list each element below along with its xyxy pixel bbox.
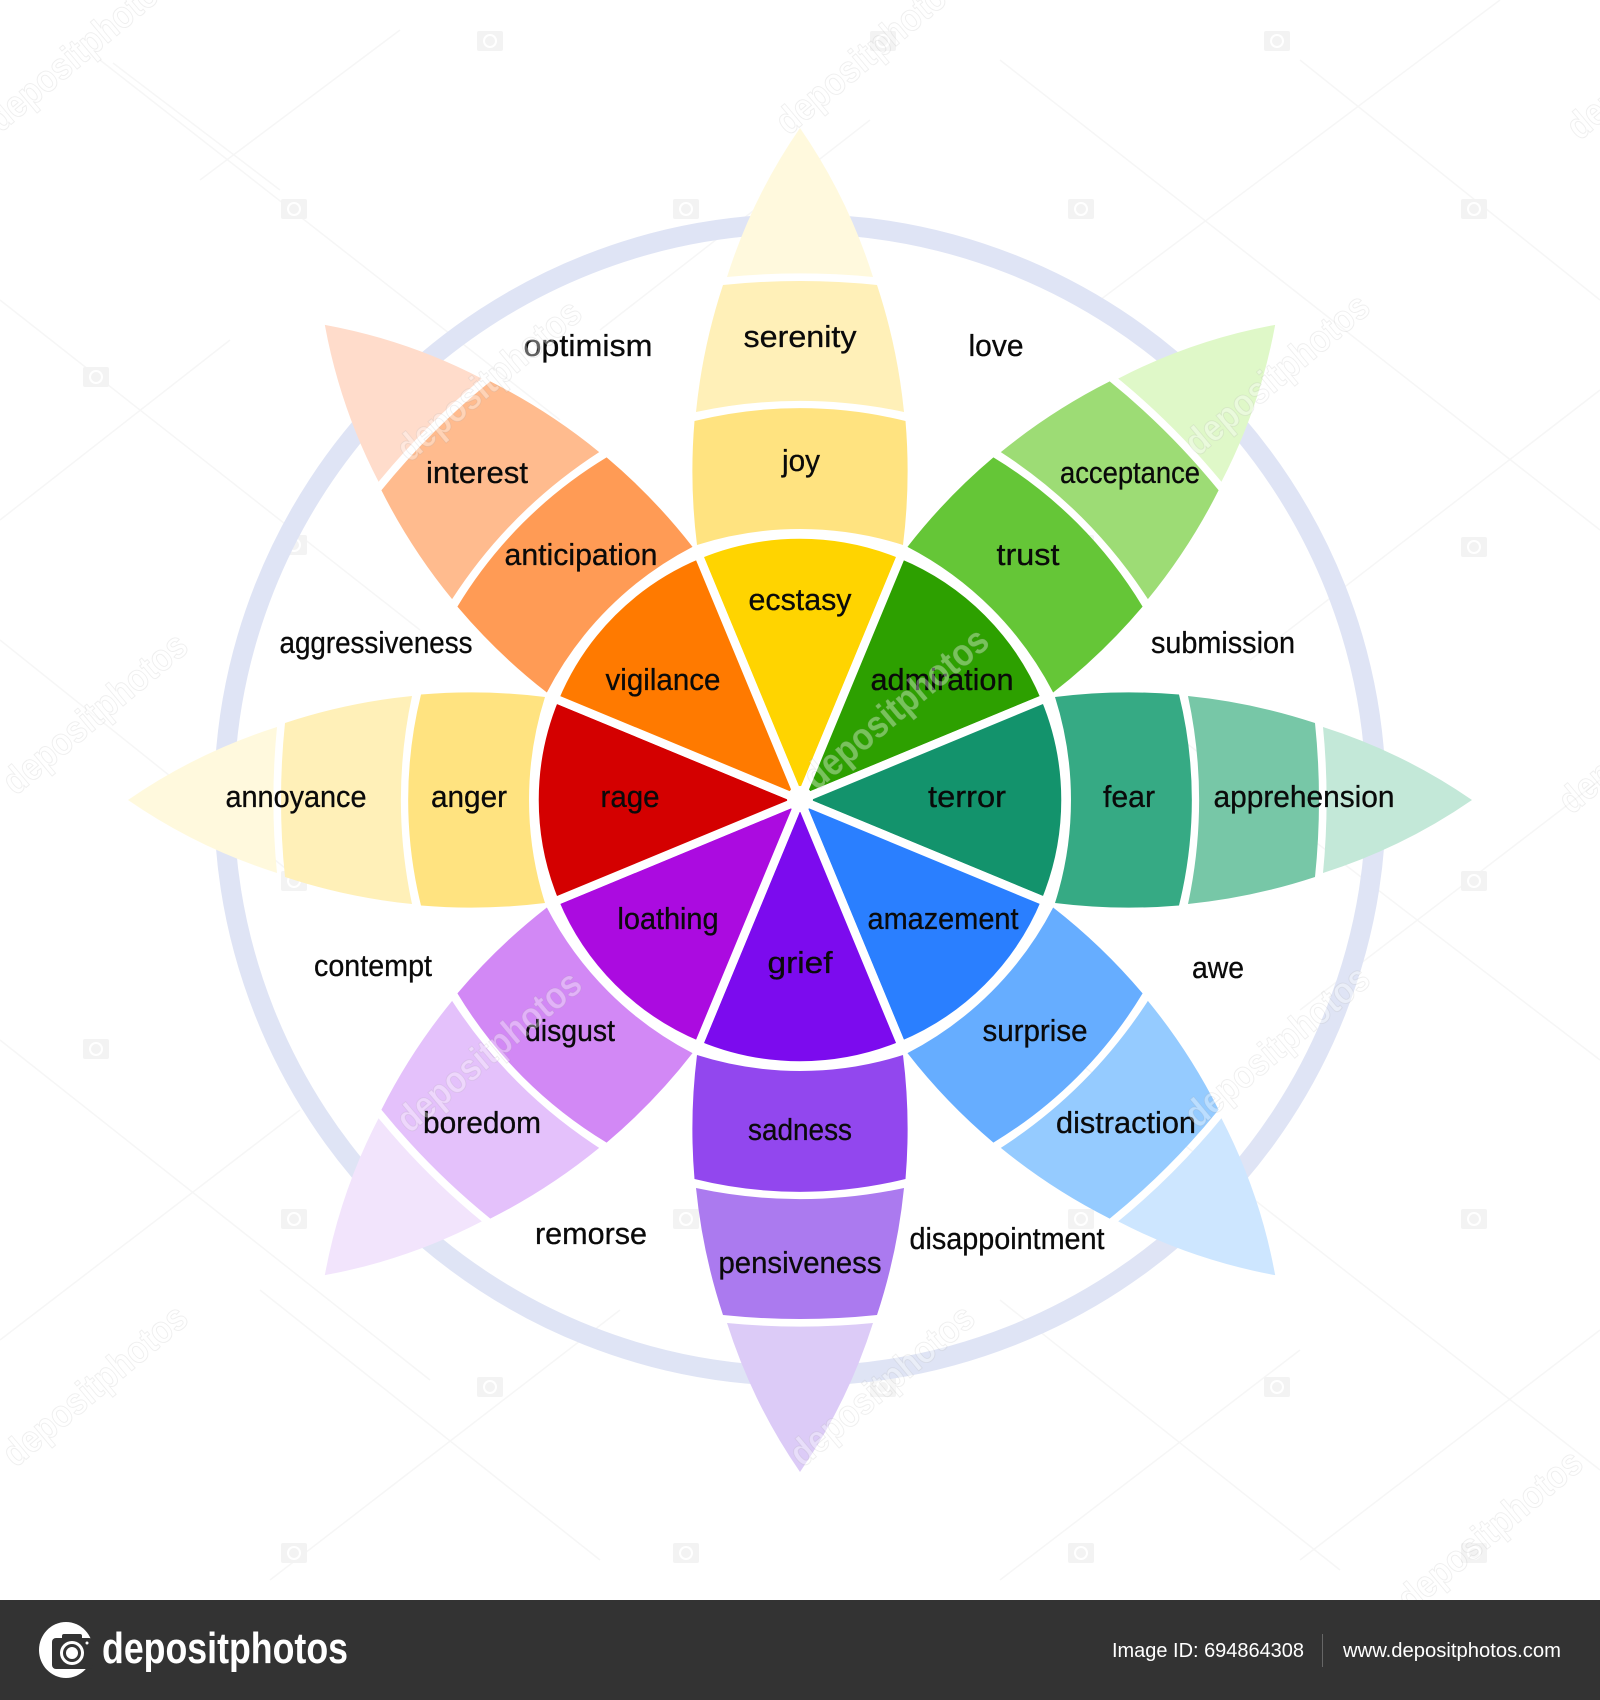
segment: disgust: [447, 904, 696, 1153]
label: rage: rage: [600, 780, 660, 814]
label: apprehension: apprehension: [1214, 780, 1394, 814]
petal: anger family: [128, 692, 545, 908]
label: love: love: [968, 329, 1024, 363]
label: optimism: optimism: [524, 329, 652, 363]
sector: rage: [534, 698, 800, 902]
segment: trust: [904, 447, 1153, 696]
label: grief: grief: [768, 946, 833, 980]
label: interest: interest: [426, 456, 529, 490]
diagonal watermark text: depositphotos: [1176, 285, 1378, 464]
segment: lightest tip: [128, 727, 277, 873]
segment: lightest tip: [273, 1118, 482, 1327]
label: trust: trust: [996, 538, 1060, 572]
label: surprise: surprise: [982, 1014, 1088, 1048]
petal: sadness family: [692, 1055, 908, 1472]
label: admiration: admiration: [870, 663, 1014, 697]
diagonal watermark text: depositphotos: [388, 291, 590, 470]
segment: pensiveness: [696, 1188, 904, 1319]
segment: surprise: [904, 904, 1153, 1153]
segment: sadness: [692, 1055, 908, 1192]
label: annoyance: annoyance: [226, 780, 366, 814]
label: disappointment: disappointment: [910, 1222, 1105, 1256]
segment: serenity: [696, 281, 904, 412]
label: loathing: loathing: [618, 902, 718, 936]
inner wheel of eight sectors: [534, 534, 1066, 1066]
label: acceptance: acceptance: [1060, 456, 1200, 490]
segment: acceptance: [1001, 359, 1241, 599]
segment: lightest tip: [1323, 727, 1472, 873]
sector: terror: [800, 698, 1066, 902]
segment: anticipation: [447, 447, 696, 696]
diagonal watermark text: depositphotos: [388, 962, 590, 1141]
label: aggressiveness: aggressiveness: [280, 626, 472, 660]
label: contempt: contempt: [314, 949, 432, 983]
footer image id: Image ID: 694864308: [1112, 1640, 1304, 1662]
sector: loathing: [540, 728, 872, 1060]
label: vigilance: vigilance: [606, 663, 720, 697]
sector: grief: [698, 800, 902, 1066]
sector: admiration: [728, 540, 1060, 872]
label: amazement: amazement: [868, 902, 1019, 936]
segment: fear: [1055, 692, 1192, 908]
sector: vigilance: [540, 540, 872, 872]
label: disgust: disgust: [525, 1014, 615, 1048]
center hub: [787, 786, 813, 812]
label: ecstasy: ecstasy: [748, 583, 852, 617]
label: pensiveness: pensiveness: [718, 1246, 882, 1280]
diagonal watermark text: depositphotos: [1176, 957, 1378, 1136]
emotion labels: [226, 320, 1394, 1280]
label: boredom: boredom: [423, 1106, 541, 1140]
segment: anger: [408, 692, 545, 908]
segment: distraction: [1001, 1001, 1241, 1241]
sector: ecstasy: [698, 534, 902, 800]
petal: disgust family: [249, 904, 696, 1351]
diagonal watermark text: depositphotos: [795, 619, 997, 798]
segment: joy: [692, 408, 908, 545]
label: anger: anger: [431, 780, 507, 814]
segment: lightest tip: [1118, 273, 1327, 482]
segment: lightest tip: [1118, 1118, 1327, 1327]
petal: joy family: [692, 128, 908, 545]
segment: apprehension: [1188, 696, 1319, 904]
diagonal watermark text: depositphotos: [0, 1296, 196, 1475]
footer brand name: depositphotos: [102, 1624, 348, 1673]
petal: fear family: [1055, 692, 1472, 908]
diagonal watermark text: depositphotos: [0, 624, 196, 803]
label: terror: terror: [928, 780, 1006, 814]
segment: interest: [359, 359, 599, 599]
label: sadness: sadness: [748, 1113, 852, 1147]
label: serenity: serenity: [744, 320, 857, 354]
label: anticipation: anticipation: [504, 538, 658, 572]
sector: amazement: [728, 728, 1060, 1060]
petal: surprise family: [904, 904, 1351, 1351]
label: joy: joy: [781, 444, 821, 478]
segment: lightest tip: [727, 1323, 873, 1472]
icon: footer camera logo: [39, 1622, 93, 1678]
label: fear: fear: [1103, 780, 1155, 814]
diagonal watermark text: depositphotos: [781, 1296, 983, 1475]
segment: boredom: [359, 1001, 599, 1241]
label: distraction: distraction: [1056, 1106, 1196, 1140]
petal: anticipation family: [249, 249, 696, 696]
petal: trust family: [904, 249, 1351, 696]
segment: annoyance: [281, 696, 412, 904]
segment: lightest tip: [273, 273, 482, 482]
footer bar: [0, 1600, 1600, 1700]
label: awe: awe: [1192, 951, 1244, 985]
label: submission: submission: [1151, 626, 1295, 660]
segment: lightest tip: [727, 128, 873, 277]
label: remorse: remorse: [535, 1217, 647, 1251]
footer website: www.depositphotos.com: [1342, 1640, 1561, 1662]
outer ring: [224, 224, 1376, 1376]
